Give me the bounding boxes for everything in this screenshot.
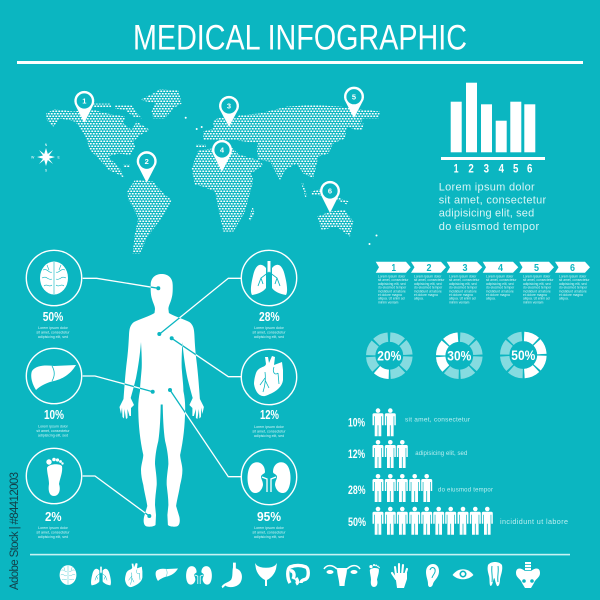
map: malaysia xyxy=(301,182,307,198)
step 1: aliqua. Ut enim ad xyxy=(378,297,405,301)
step 5: incididunt ut labore xyxy=(523,289,551,293)
people row 50%: incididunt ut labore xyxy=(500,517,568,526)
map pin 1: 1 xyxy=(82,97,86,106)
step 6: Lorem ipsum dolor xyxy=(559,274,587,278)
step 6: 6 xyxy=(570,263,575,274)
vertical stock credit: Adobe Stock | #84412003 xyxy=(9,472,21,590)
organ callout: brain: sit amet, consectetur xyxy=(36,331,70,335)
map: arabia xyxy=(240,155,263,174)
organ callout: brain: Lorem ipsum dolor xyxy=(38,326,69,330)
world map: americas xyxy=(46,89,182,253)
organ callout: foot: 2% xyxy=(45,509,62,524)
step 5: minim veniam xyxy=(523,300,544,304)
map: madagascar xyxy=(249,207,255,221)
organ callout: heart xyxy=(241,349,297,438)
step 3: incididunt ut labore xyxy=(449,289,477,293)
organ callout: liver xyxy=(26,348,82,438)
icon: lungs xyxy=(91,567,111,585)
donut 50%: 50% xyxy=(511,347,536,363)
organ callout: kidneys: 95% xyxy=(257,509,281,524)
map pin 3: 3 xyxy=(227,102,231,111)
step 5 xyxy=(519,262,554,304)
bar chart: 1 xyxy=(454,161,459,175)
map pin 2 xyxy=(137,151,157,183)
compass rose: S xyxy=(45,168,48,172)
step 3: aliqua. Ut enim ad xyxy=(449,297,476,301)
people row 12%: 12% xyxy=(348,447,365,461)
organ callout: kidneys: adipisicing elit, sed xyxy=(254,535,284,539)
bar chart: 6 xyxy=(527,161,533,175)
step 3: minim veniam xyxy=(449,300,470,304)
map pin 1 xyxy=(74,91,94,123)
step 6: aliqua. xyxy=(559,297,569,301)
map pin 4: 4 xyxy=(220,146,225,155)
donut 20% xyxy=(371,337,408,374)
compass rose: N xyxy=(45,143,48,147)
step 1: et dolore magna xyxy=(378,293,402,297)
step 3: et dolore magna xyxy=(449,293,473,297)
organ callout: kidneys xyxy=(241,449,297,539)
step 1: minim veniam xyxy=(378,300,399,304)
step 2: adipisicing elit, sed xyxy=(414,282,442,286)
icon row xyxy=(60,562,540,588)
organ callout: heart: sit amet, consectetur xyxy=(252,430,286,434)
step 4: et dolore magna xyxy=(486,293,510,297)
people row 50%: 50% xyxy=(348,515,366,529)
step 5: sit amet, consectetur xyxy=(523,278,554,282)
people row 50% xyxy=(348,507,568,535)
step 6: sit amet, consectetur xyxy=(559,278,590,282)
step 2: do eiusmod tempor xyxy=(414,286,443,290)
organ callout: kidneys: Lorem ipsum dolor xyxy=(254,526,285,530)
step 5: 5 xyxy=(534,263,539,274)
step 4: Lorem ipsum dolor xyxy=(486,274,514,278)
people row 10% xyxy=(348,408,471,436)
bar chart xyxy=(441,83,545,175)
organ callout: lungs: adipisicing elit, sed xyxy=(254,335,284,339)
donut 20%: 20% xyxy=(377,348,402,364)
human body silhouette xyxy=(120,274,204,527)
map pin 6 xyxy=(320,181,340,213)
step 6: adipisicing elit, sed xyxy=(559,282,587,286)
map pin 5 xyxy=(344,87,364,118)
step 5: aliqua. Ut enim ad xyxy=(523,297,550,301)
stray map dots xyxy=(185,117,378,245)
icon: kidneys xyxy=(186,566,212,585)
people row 12%: adipisicing elit, sed xyxy=(415,451,467,457)
map: africa xyxy=(192,147,253,232)
step 4: do eiusmod tempor xyxy=(486,286,515,290)
organ callout: foot: Lorem ipsum dolor xyxy=(38,526,69,530)
compass rose: E xyxy=(58,155,60,159)
donut 50% xyxy=(505,336,542,374)
connector lines xyxy=(83,278,242,516)
map: canadian islands xyxy=(115,106,142,118)
icon: bladder xyxy=(255,563,277,586)
organ callout: kidneys: sit amet, consectetur xyxy=(252,530,286,534)
donut 30%: 30% xyxy=(447,348,472,364)
step 1: do eiusmod tempor xyxy=(378,286,407,290)
map: eurasia xyxy=(203,105,380,180)
step 4: adipisicing elit, sed xyxy=(486,282,514,286)
step 6: do eiusmod tempor xyxy=(559,286,588,290)
organ callout: heart: adipisicing elit, sed xyxy=(254,434,284,438)
organ callout: lungs: sit amet, consectetur xyxy=(252,331,286,335)
icon: pelvis xyxy=(516,562,540,588)
bar chart: 3 xyxy=(484,161,489,175)
title rule xyxy=(17,61,583,64)
icon: tooth xyxy=(488,562,502,586)
organ callout: liver: adipisicing elit, sed xyxy=(38,434,68,438)
icon: ear xyxy=(426,564,439,587)
map pin 3 xyxy=(219,96,239,127)
map: arctic islands xyxy=(93,104,112,108)
step 3: Lorem ipsum dolor xyxy=(449,274,477,278)
compass rose: W xyxy=(31,155,35,159)
step 1: incididunt ut labore xyxy=(378,289,406,293)
icon: stomach xyxy=(222,563,242,588)
organ callout: brain: adipisicing elit, sed xyxy=(38,335,68,339)
organ callout: foot: sit amet, consectetur xyxy=(36,530,70,534)
organ callout: heart: 12% xyxy=(260,407,279,422)
organ callout: liver: 10% xyxy=(44,407,64,422)
people row 28%: do eiusmod tempor xyxy=(438,488,493,494)
map: iberia xyxy=(196,144,206,148)
step 4: incididunt ut labore xyxy=(486,289,514,293)
organ callout: heart: Lorem ipsum dolor xyxy=(254,425,285,429)
step 1: adipisicing elit, sed xyxy=(378,282,406,286)
step 4: 4 xyxy=(498,263,503,274)
chart caption: do eiusmod tempor xyxy=(439,221,540,233)
map: caribbean xyxy=(123,164,130,167)
step 4: aliqua. xyxy=(486,297,496,301)
step 3 xyxy=(447,262,482,304)
people row 12% xyxy=(348,440,467,468)
step 5: Lorem ipsum dolor xyxy=(523,274,551,278)
step 1: Lorem ipsum dolor xyxy=(378,274,406,278)
map: greenland xyxy=(140,89,182,118)
map pin 2: 2 xyxy=(145,157,149,166)
world map: old world xyxy=(192,105,380,237)
step 3: sit amet, consectetur xyxy=(449,278,480,282)
organ callout: foot xyxy=(26,448,82,539)
step 6: incididunt ut labore xyxy=(559,289,587,293)
step 2 xyxy=(411,262,446,301)
people row 28%: 28% xyxy=(348,483,366,497)
icon: eye xyxy=(453,569,473,579)
step 2: Lorem ipsum dolor xyxy=(414,274,442,278)
title: MEDICAL INFOGRAPHIC xyxy=(133,19,467,58)
organ callout: lungs: 28% xyxy=(259,309,280,324)
map pin 6: 6 xyxy=(328,187,332,196)
people row 28% xyxy=(348,474,493,502)
chart caption: adipisicing elit, sed xyxy=(439,208,534,220)
organ callout: brain: 50% xyxy=(43,309,64,324)
map: indonesia xyxy=(312,188,349,204)
organ callout: lungs: Lorem ipsum dolor xyxy=(254,326,285,330)
bar chart: 2 xyxy=(468,161,474,175)
step 1: sit amet, consectetur xyxy=(378,278,409,282)
step 4: sit amet, consectetur xyxy=(486,278,517,282)
step 5: et dolore magna xyxy=(523,293,547,297)
map pin 5: 5 xyxy=(352,92,356,101)
chart caption: Lorem ipsum dolor xyxy=(439,182,535,194)
icon: foot xyxy=(369,564,380,587)
map: japan xyxy=(356,122,363,130)
connector lines over body with end dots xyxy=(124,286,196,518)
organ callout: liver: Lorem ipsum dolor xyxy=(38,424,69,428)
bar chart: 4 xyxy=(499,161,504,175)
step 1 xyxy=(376,262,411,304)
step 2: sit amet, consectetur xyxy=(414,278,445,282)
icon: liver xyxy=(156,568,178,581)
organ callout: lungs xyxy=(241,250,297,339)
bar chart: 5 xyxy=(513,161,519,175)
step 2: aliqua. xyxy=(414,297,424,301)
chart caption xyxy=(439,182,547,233)
step 4 xyxy=(483,262,518,301)
chart caption: sit amet, consectetur xyxy=(439,195,547,207)
icon: brain xyxy=(60,565,76,585)
step 3: adipisicing elit, sed xyxy=(449,282,477,286)
compass rose xyxy=(31,143,60,172)
step 2: et dolore magna xyxy=(414,293,438,297)
icon: uterus xyxy=(324,566,360,586)
step 3: 3 xyxy=(462,263,468,274)
step 2: incididunt ut labore xyxy=(414,289,442,293)
process chevrons xyxy=(376,262,590,304)
organ callout: brain xyxy=(26,250,82,339)
donut 30% xyxy=(441,337,478,374)
step 6: et dolore magna xyxy=(559,293,583,297)
organ callout: foot: adipisicing elit, sed xyxy=(38,535,68,539)
map: australia xyxy=(317,210,353,237)
icon: hand xyxy=(392,564,407,588)
step 5: adipisicing elit, sed xyxy=(523,282,551,286)
step 5: do eiusmod tempor xyxy=(523,286,552,290)
step 3: do eiusmod tempor xyxy=(449,286,478,290)
step 1: 1 xyxy=(392,263,396,274)
icon: heart xyxy=(125,563,142,587)
organ callout: liver: sit amet, consectetur xyxy=(36,429,70,433)
people row 10%: sit amet, consectetur xyxy=(405,417,471,424)
footer rule xyxy=(30,554,570,555)
step 6 xyxy=(555,262,590,301)
step 2: 2 xyxy=(426,263,432,274)
map: south america xyxy=(127,180,172,253)
map pin 4 xyxy=(212,140,232,172)
icon: intestine xyxy=(288,566,308,584)
map: north america xyxy=(46,109,150,178)
people row 10%: 10% xyxy=(348,416,365,430)
